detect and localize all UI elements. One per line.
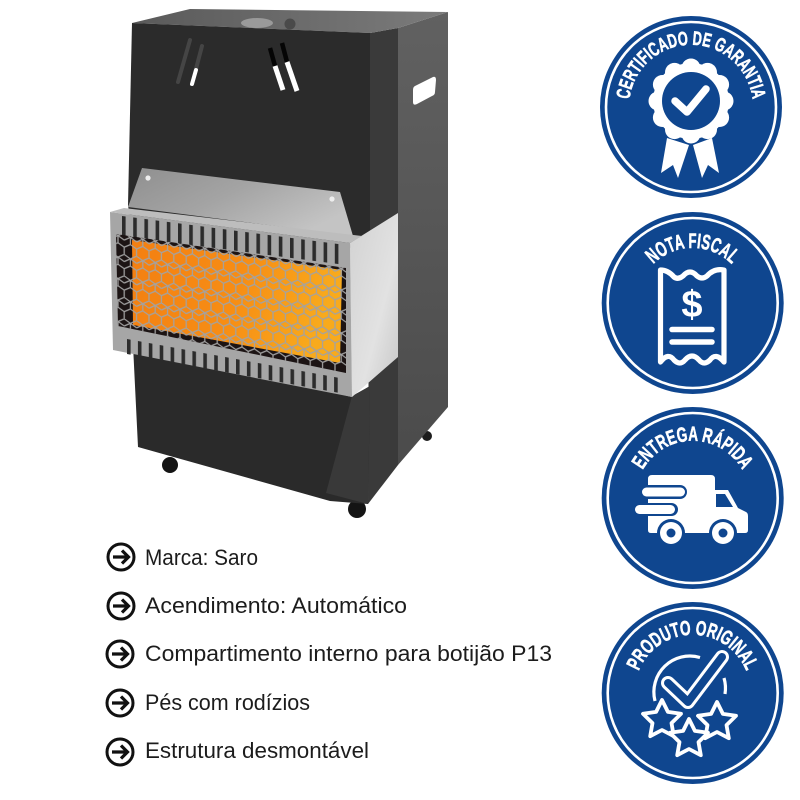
badge text: NOTA FISCAL	[644, 233, 738, 264]
hex grille	[116, 234, 346, 373]
item: acendimento: Acendimento: Automático	[145, 593, 407, 618]
arrow icon	[107, 641, 133, 667]
guard side panel	[350, 213, 398, 397]
spec list	[107, 544, 552, 765]
heater side strip	[368, 28, 398, 504]
item: marca: Marca: Saro	[145, 545, 258, 570]
item: estrutura: Estrutura desmontável	[145, 738, 369, 763]
badge text: PRODUTO ORIGINAL	[626, 620, 758, 671]
heater right side panel	[398, 12, 448, 465]
arrow icon	[108, 544, 134, 570]
heater rear foot	[422, 431, 432, 441]
icon: check with stars	[643, 656, 736, 755]
product: gas heater	[110, 9, 448, 518]
badge: nota fiscal	[602, 212, 784, 394]
icon: receipt	[660, 270, 724, 363]
heater right foot	[348, 500, 366, 518]
badge text: ENTREGA RÁPIDA	[631, 426, 752, 470]
badge: produto original	[602, 602, 784, 784]
bottom slots	[127, 339, 339, 393]
steel hood	[128, 168, 353, 236]
arrow icon	[107, 690, 133, 716]
heater lid	[132, 9, 448, 33]
icon: delivery truck	[633, 475, 748, 547]
item: pes: Pés com rodízios	[145, 690, 310, 715]
badge: entrega rapida	[602, 407, 784, 589]
top valve	[284, 18, 296, 30]
hex grille dark backing	[116, 234, 346, 373]
guard top edge	[110, 208, 362, 243]
lower front facet	[326, 386, 370, 504]
badge: certificado de garantia	[600, 16, 782, 198]
top slots	[122, 216, 339, 264]
hood screw left	[145, 175, 151, 181]
icon: receipt: $	[681, 284, 703, 326]
heater upper front	[128, 23, 370, 250]
left vents	[178, 40, 202, 84]
guard front	[110, 212, 352, 397]
arrow icon	[108, 593, 134, 619]
item: marca	[108, 544, 258, 570]
heater left foot	[162, 457, 178, 473]
item: compartimento: Compartimento interno para botijão P13	[145, 641, 552, 666]
right vents	[270, 43, 297, 91]
hood screw right	[329, 196, 335, 202]
glowing burner	[132, 240, 342, 363]
badge text: CERTIFICADO DE GARANTIA	[616, 31, 766, 100]
handle opening	[413, 77, 436, 105]
arrow icon	[107, 739, 133, 765]
top knob	[241, 18, 273, 28]
heater lower front	[133, 345, 370, 504]
icon: rosette	[648, 58, 734, 178]
